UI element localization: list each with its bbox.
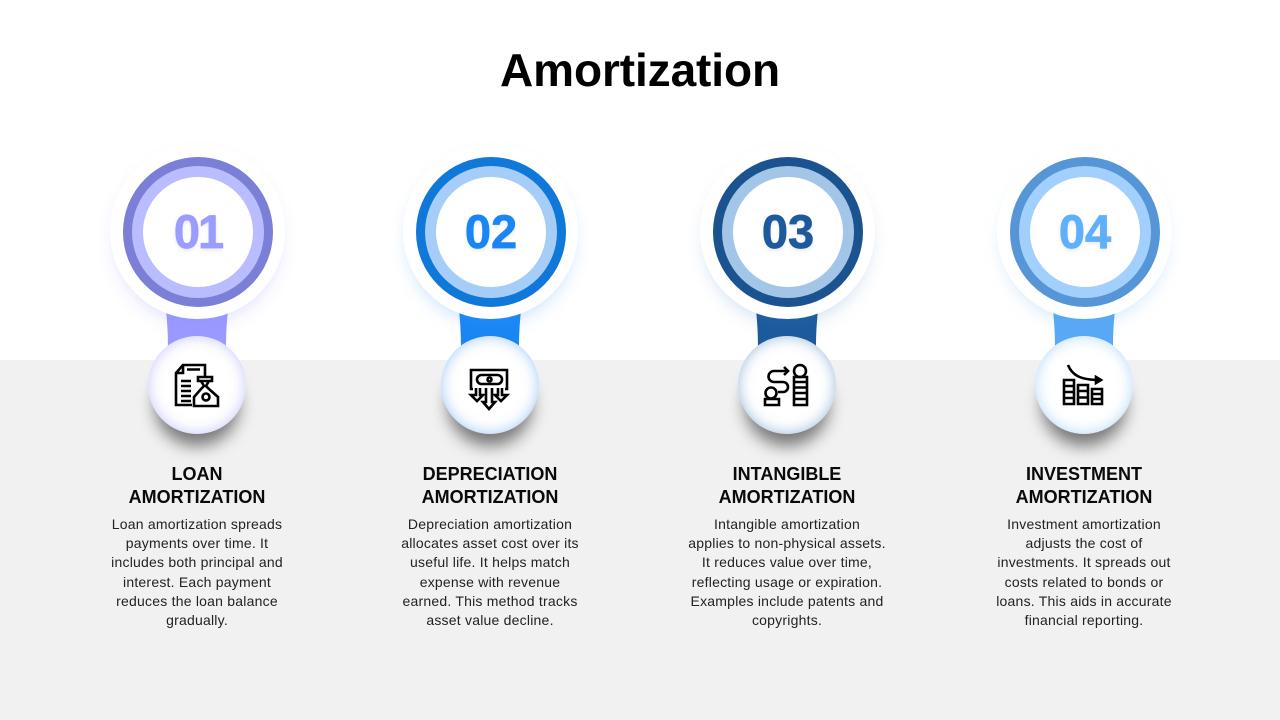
description: adjusts the cost of [1025, 535, 1143, 551]
icon circle shadow [745, 364, 829, 446]
inner ring [132, 166, 264, 298]
inner ring [425, 166, 557, 298]
icon: loan document with money bag [174, 364, 220, 408]
heading: AMORTIZATION [719, 487, 855, 507]
number 01 [143, 177, 253, 287]
heading [719, 464, 855, 507]
number 03 [733, 177, 843, 287]
panel: step 1 loan amortization [110, 157, 285, 628]
connector [459, 313, 521, 346]
heading: INVESTMENT [1026, 464, 1142, 484]
connector [166, 313, 228, 346]
heading: INTANGIBLE [733, 464, 841, 484]
description: It reduces value over time, [702, 554, 872, 570]
description: Loan amortization spreads [112, 516, 282, 532]
description [111, 516, 283, 628]
description: includes both principal and [111, 554, 283, 570]
number 01: 01 [174, 205, 222, 258]
description: payments over time. It [126, 535, 268, 551]
number 02: 02 [465, 205, 517, 258]
description: expense with revenue [420, 574, 560, 590]
heading: AMORTIZATION [1016, 487, 1152, 507]
icon circle [148, 336, 246, 434]
outer ring [123, 157, 273, 307]
heading: DEPRECIATION [423, 464, 557, 484]
icon circle [738, 336, 836, 434]
panel: step 4 investment amortization [996, 157, 1174, 628]
heading: LOAN [172, 464, 222, 484]
description [996, 516, 1172, 628]
number 04: 04 [1059, 205, 1111, 258]
icon: coins exchange [764, 364, 808, 406]
number badge halo [700, 144, 875, 319]
outer ring [416, 157, 566, 307]
description: reflecting usage or expiration. [692, 574, 882, 590]
description: copyrights. [752, 612, 822, 628]
heading [422, 464, 558, 507]
inner ring [1019, 166, 1151, 298]
number 02 [436, 177, 546, 287]
description [688, 516, 886, 628]
description: loans. This aids in accurate [996, 593, 1172, 609]
panel: step 3 intangible amortization [688, 157, 886, 628]
description [401, 516, 579, 628]
icon: banknote with down arrows [468, 368, 510, 411]
number badge halo [997, 144, 1172, 319]
icon circle [441, 336, 539, 434]
description: Investment amortization [1007, 516, 1161, 532]
description: financial reporting. [1025, 612, 1143, 628]
description: useful life. It helps match [410, 554, 570, 570]
description: asset value decline. [426, 612, 554, 628]
heading: AMORTIZATION [129, 487, 265, 507]
panel: step 2 depreciation amortization [400, 157, 581, 628]
icon circle shadow [155, 364, 239, 446]
icon: declining bars [1062, 364, 1104, 406]
description: earned. This method tracks [402, 593, 578, 609]
heading [129, 464, 265, 507]
description: investments. It spreads out [997, 554, 1171, 570]
description: Depreciation amortization [408, 516, 572, 532]
description: interest. Each payment [123, 574, 271, 590]
number 03: 03 [762, 205, 814, 258]
icon circle [1035, 336, 1133, 434]
outer ring [1010, 157, 1160, 307]
title: Amortization [500, 44, 780, 96]
description: allocates asset cost over its [401, 535, 579, 551]
connector [1053, 313, 1115, 346]
number 04 [1030, 177, 1140, 287]
outer ring [713, 157, 863, 307]
description: reduces the loan balance [116, 593, 278, 609]
heading: AMORTIZATION [422, 487, 558, 507]
description: costs related to bonds or [1005, 574, 1163, 590]
description: Intangible amortization [714, 516, 860, 532]
description: Examples include patents and [691, 593, 883, 609]
icon circle shadow [448, 364, 532, 446]
connector [756, 313, 818, 346]
number badge halo [110, 144, 285, 319]
description: gradually. [166, 612, 228, 628]
heading [1016, 464, 1152, 507]
inner ring [722, 166, 854, 298]
description: applies to non-physical assets. [688, 535, 886, 551]
icon circle shadow [1042, 364, 1126, 446]
number badge halo [403, 144, 578, 319]
